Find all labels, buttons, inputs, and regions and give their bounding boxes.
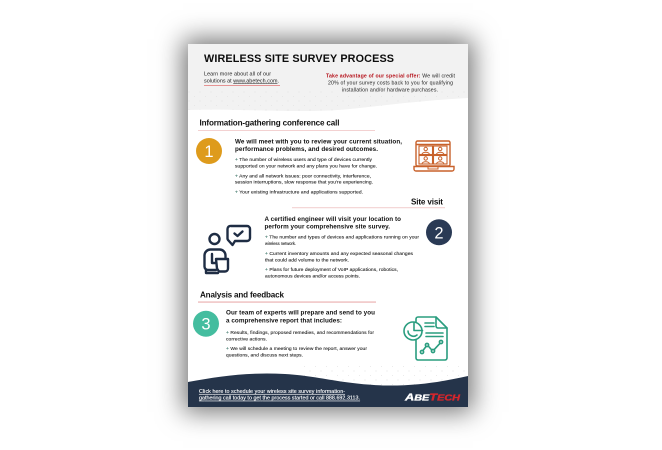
section 1: conference call (196, 119, 454, 195)
footer call to action: Click here to schedule your wireless site survey information- (199, 389, 345, 395)
step 2 bullets (265, 235, 419, 279)
website note: solutions at www.abetech.com. (204, 78, 279, 84)
step 3 lead text: Our team of experts will prepare and send to you (226, 310, 375, 317)
number badge 1: 1 (204, 143, 214, 161)
icon: laptop video call (414, 141, 454, 171)
step 1 bullets: supported on your network and any plans you have for change. (235, 163, 377, 169)
step 1 bullets: + Your existing infrastructure and applications supported. (235, 189, 363, 195)
step 3 bullets: corrective actions. (226, 337, 267, 343)
icon: report document with charts (404, 317, 447, 360)
step 2 bullets: + Current inventory amounts and any expected seasonal changes (265, 251, 414, 257)
step 3 bullets (226, 330, 374, 359)
step 1 lead text (235, 139, 402, 153)
step 3 lead text (226, 310, 375, 324)
special offer: installation and/or hardware purchases. (342, 88, 438, 94)
footer call to action (199, 389, 360, 402)
step 3 bullets: + We will schedule a meeting to review the report, answer your (226, 346, 367, 352)
step 2 bullets: that could add volume to the network. (265, 257, 349, 263)
logo: AbeTech: ABE TECH (404, 392, 461, 403)
number badge 2: 2 (434, 224, 444, 242)
number badge 2 (426, 219, 452, 245)
number badge 1 (196, 138, 222, 164)
special offer: 20% of your survey costs back to you for qualifying (328, 81, 453, 87)
step 1 bullets (235, 157, 377, 195)
step 1 bullets: + Any and all network issues: poor connectivity, interference, (235, 173, 371, 179)
section 2: site visit (204, 197, 452, 279)
step 2 bullets: + Plans for future deployment of VoIP applications, robotics, (265, 267, 398, 273)
step 1 lead text: We will meet with you to review your current situation, (235, 139, 402, 146)
step 3 lead text: a comprehensive report that includes: (226, 317, 342, 324)
step 2 lead text: A certified engineer will visit your location to (264, 216, 401, 223)
number badge 3: 3 (201, 316, 211, 334)
title: WIRELESS SITE SURVEY PROCESS (204, 53, 394, 65)
website note (204, 72, 280, 86)
step 2 bullets: wireless network. (265, 241, 296, 247)
footer band (188, 364, 468, 407)
special offer (326, 74, 456, 94)
heading: site visit: Site visit (411, 197, 443, 206)
step 2 lead text (264, 216, 401, 230)
step 2 bullets: autonomous devices and/or access points. (265, 273, 360, 279)
heading: information-gathering: Information-gathering conference call (200, 119, 340, 128)
step 2 bullets: + The number and types of devices and applications running on your (265, 235, 419, 241)
step 1 bullets: + The number of wireless users and type of devices currently (235, 157, 373, 163)
step 1 bullets: session interruptions, slow response that you're experiencing. (235, 180, 373, 186)
step 3 bullets: questions, and discuss next steps. (226, 353, 303, 359)
special offer: Take advantage of our special offer: We will credit (326, 74, 456, 80)
heading: analysis and feedback: Analysis and feedback (200, 291, 284, 300)
step 3 bullets: + Results, findings, proposed remedies, and recommendations for (226, 330, 374, 336)
header band (188, 44, 468, 111)
page background (188, 44, 468, 407)
footer call to action: gathering call today to get the process started or call 888.692.3113. (199, 396, 360, 402)
page shadow (188, 44, 468, 407)
icon: person with speech bubble (204, 226, 250, 273)
number badge 3 (193, 311, 219, 337)
step 1 lead text: performance problems, and desired outcomes. (235, 146, 378, 153)
section 3: analysis and feedback (193, 291, 447, 360)
step 2 lead text: perform your comprehensive site survey. (264, 223, 390, 230)
website note: Learn more about all of our (204, 72, 271, 78)
